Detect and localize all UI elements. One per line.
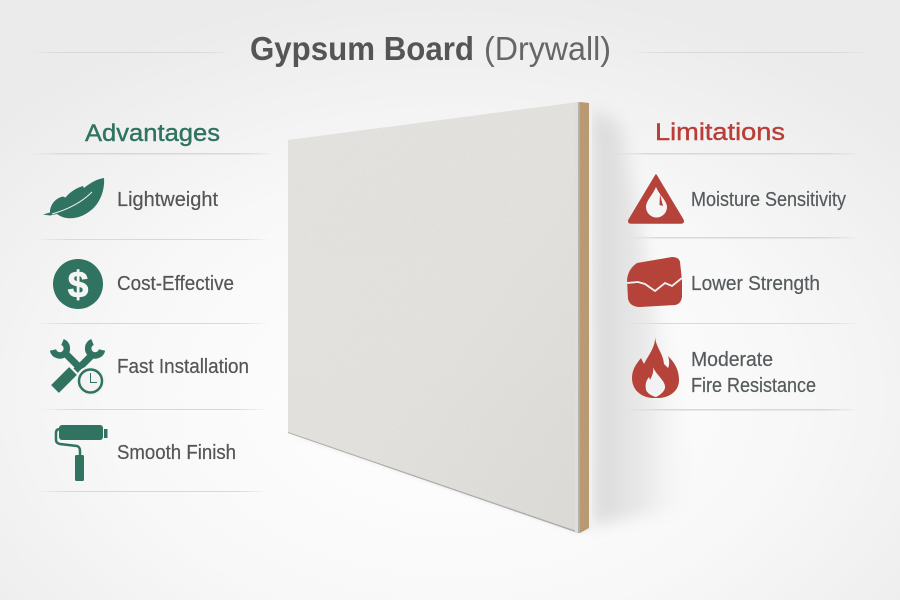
panel: limitations — [612, 119, 862, 410]
icon: moisture warning — [629, 175, 683, 223]
text: moderate fire resistance: Fire Resistance — [691, 375, 816, 397]
icon: dollar coin: $ — [68, 264, 89, 305]
text: moderate fire resistance: Moderate — [691, 349, 773, 371]
panel: board shadow — [290, 108, 695, 533]
text: smooth finish: Smooth Finish — [117, 442, 236, 464]
text: cost-effective: Cost-Effective — [117, 273, 234, 295]
text: moderate fire resistance — [691, 349, 816, 397]
text: moisture sensitivity: Moisture Sensitivity — [691, 189, 846, 211]
text: fast installation: Fast Installation — [117, 356, 249, 378]
title — [30, 30, 870, 67]
icon: tools and clock — [53, 342, 106, 396]
icon: paint roller — [56, 425, 108, 481]
heading: advantages: Advantages — [85, 120, 220, 147]
panel: advantages — [30, 120, 275, 492]
title: (Drywall) — [484, 30, 611, 67]
icon: dollar coin — [53, 259, 103, 309]
board face — [288, 102, 578, 533]
heading: limitations: Limitations — [655, 119, 785, 146]
text: lower strength: Lower Strength — [691, 273, 820, 295]
icon: cracked block — [627, 257, 682, 307]
icon: flame — [632, 335, 679, 398]
gypsum board illustration — [280, 95, 600, 540]
text: lightweight: Lightweight — [117, 189, 218, 211]
title: Gypsum Board — [250, 30, 474, 67]
icon: feather — [43, 178, 104, 218]
board edge core — [580, 102, 589, 533]
